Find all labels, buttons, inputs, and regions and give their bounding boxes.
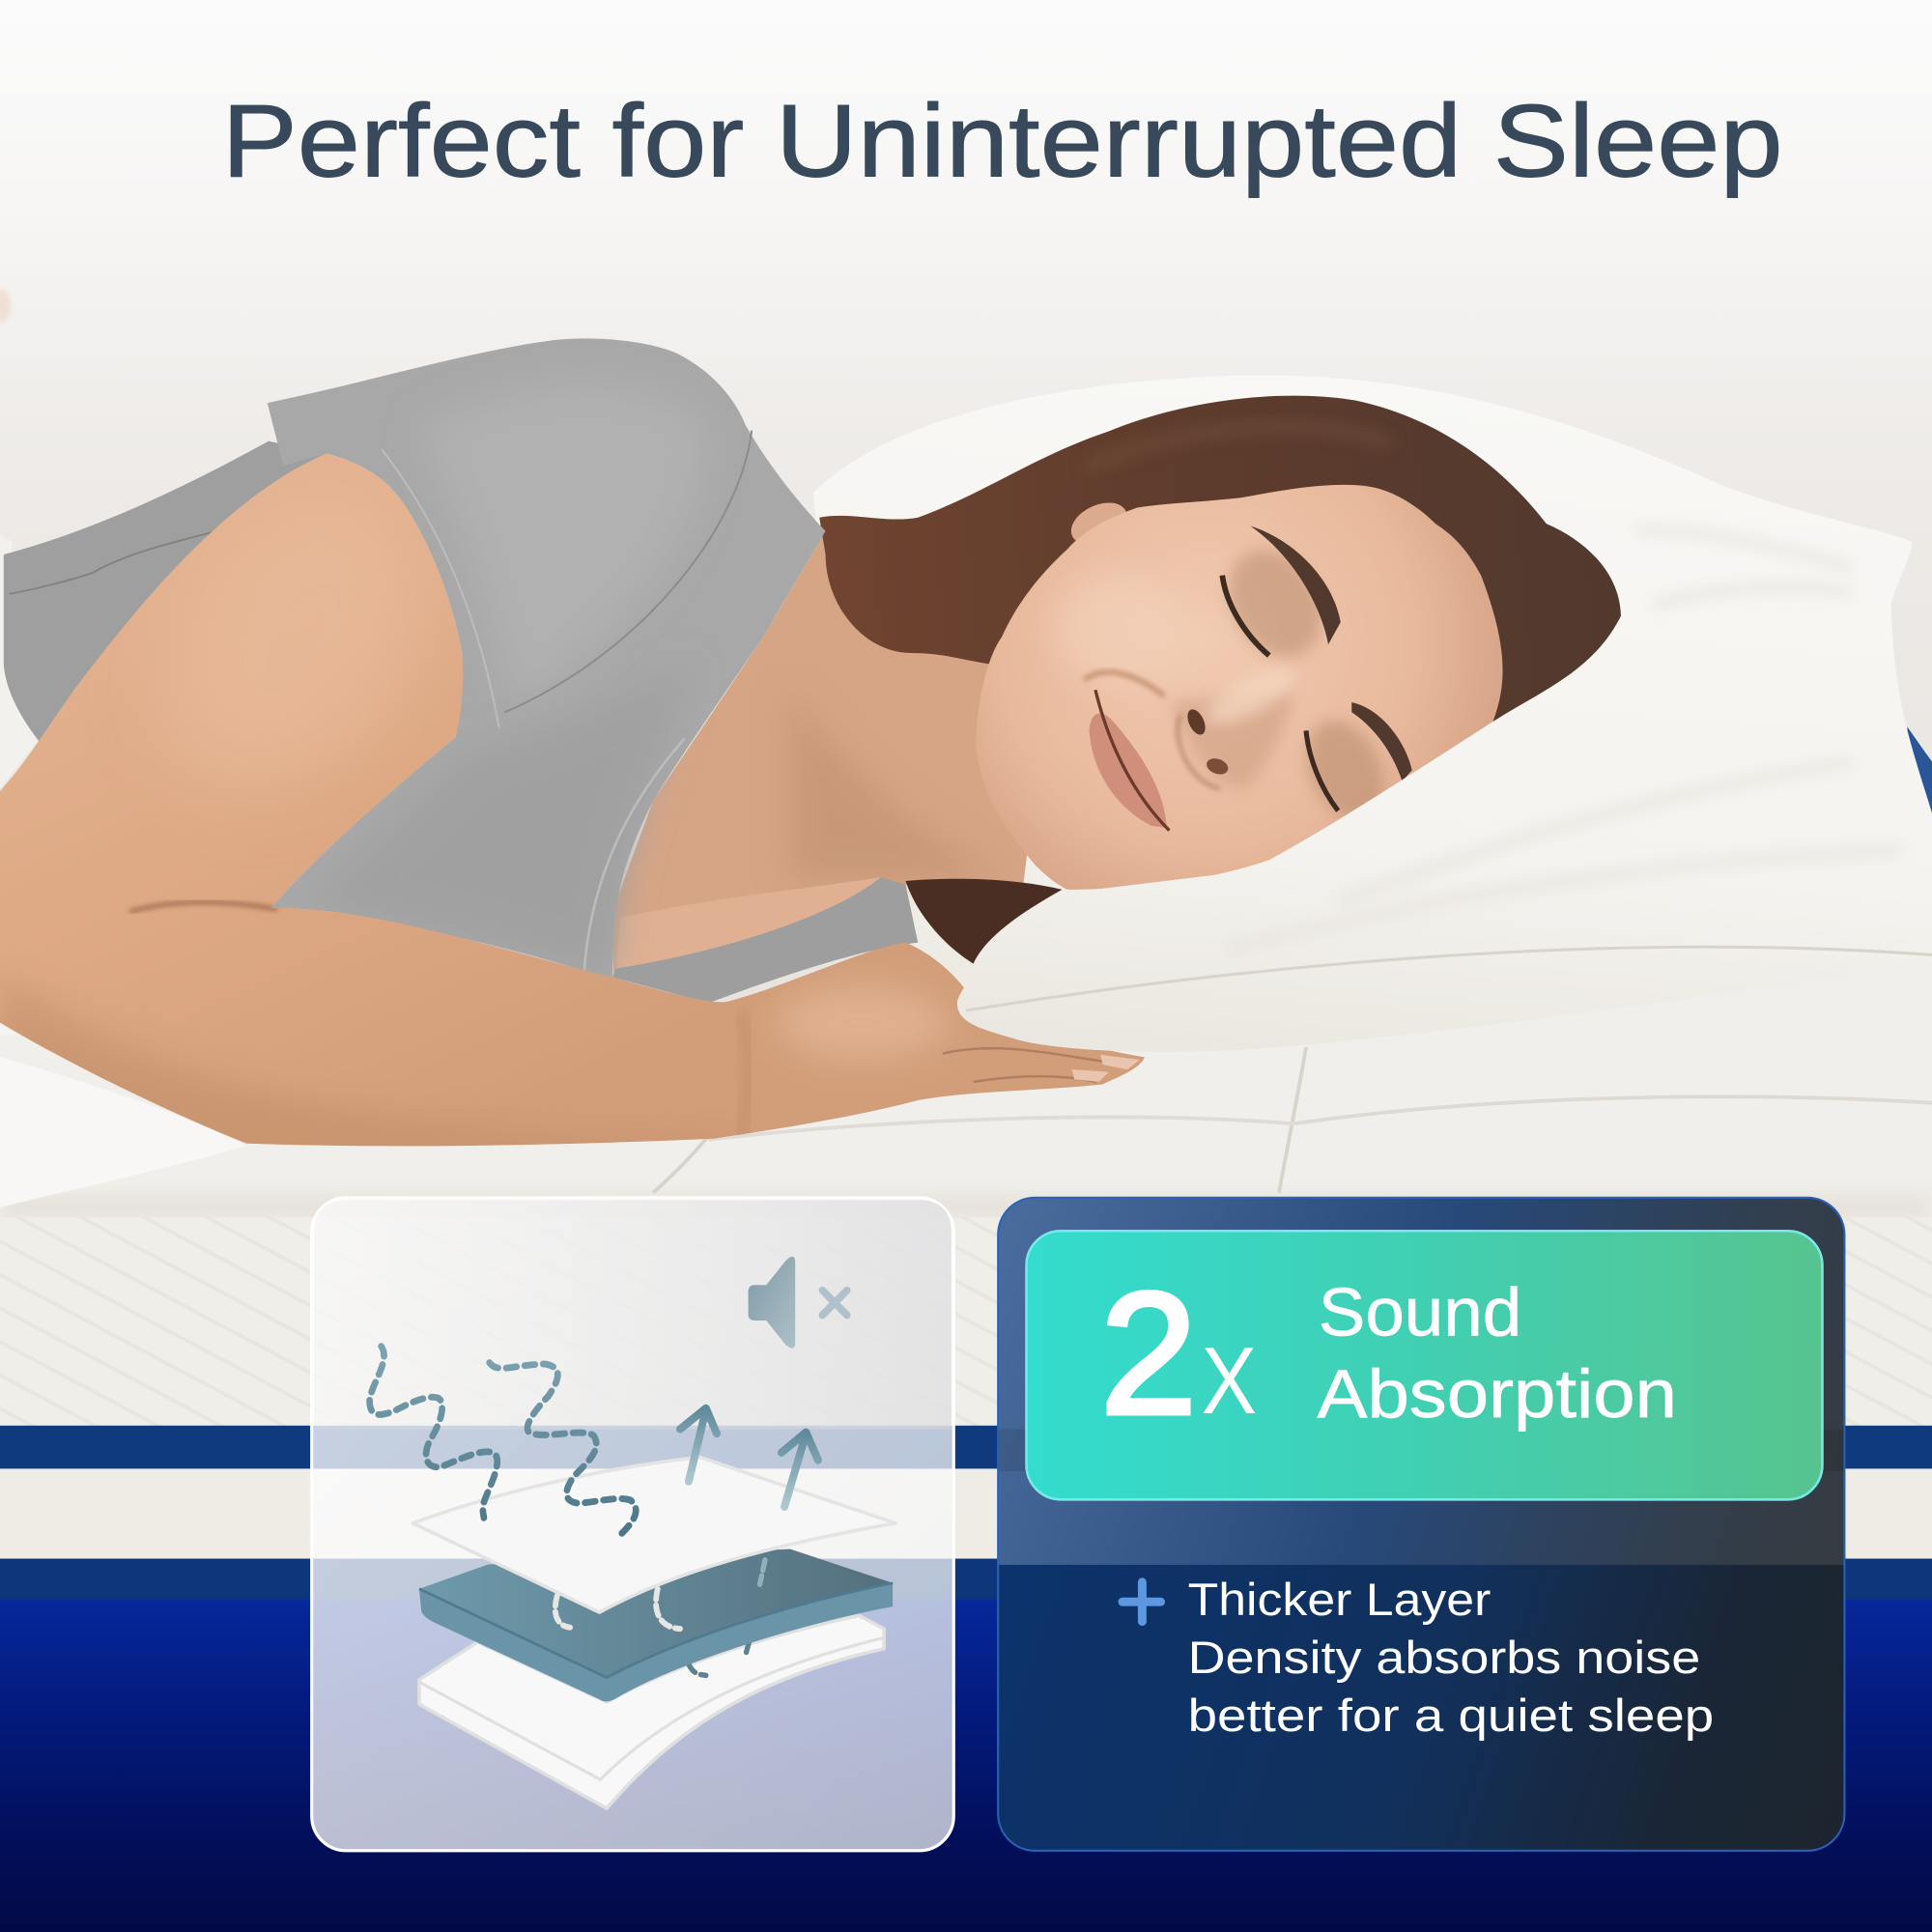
nose form — [1178, 715, 1220, 788]
upper eyelid shadow — [1225, 546, 1324, 662]
description text — [1188, 1575, 1714, 1742]
foam top — [419, 1548, 893, 1678]
photo: chest — [616, 877, 881, 971]
photo: shirt seams — [10, 431, 752, 974]
illustration — [370, 1257, 895, 1808]
upper eyelashes — [1222, 576, 1269, 656]
blue sliver behind pillow — [1907, 727, 1932, 813]
photo: lower hair — [906, 879, 1062, 963]
hem fold — [10, 529, 222, 594]
panel: layered foam illustration card — [312, 1198, 953, 1851]
card outline — [998, 1198, 1844, 1851]
glass card — [312, 1198, 953, 1851]
photo: sheet behind shoulder — [0, 535, 37, 788]
teal foam layer — [419, 1548, 893, 1701]
nostril upper — [1184, 706, 1208, 737]
line two: Density absorbs noise — [1188, 1633, 1700, 1684]
photo: front of pillow — [957, 487, 1932, 1052]
photo: face — [976, 485, 1503, 890]
stat number: 2 — [1100, 1257, 1197, 1451]
bottom layer edge line — [419, 1637, 884, 1779]
photo: neck and chest — [612, 529, 1060, 980]
forearm lower shade — [0, 993, 701, 1146]
photo: shirt main — [268, 338, 826, 980]
speaker body — [749, 1257, 795, 1349]
stat label — [1318, 1274, 1677, 1432]
photo background: wall — [0, 0, 1932, 1010]
lower glass — [998, 1565, 1844, 1851]
mute cross — [822, 1291, 847, 1315]
upper eyebrow — [1251, 526, 1341, 644]
pillow soft ribs — [1233, 529, 1897, 949]
sound dashes on foam — [555, 1589, 680, 1629]
photo: ear — [1065, 495, 1134, 553]
photo: shirt light area — [419, 384, 706, 702]
mouth line — [1095, 690, 1169, 831]
stat multiplier: X — [1202, 1327, 1257, 1434]
photo: shirt v-neck piece — [612, 877, 918, 1003]
stat panel — [1026, 1231, 1822, 1499]
fingernails — [1072, 1055, 1140, 1082]
lower eyebrow — [1351, 702, 1412, 781]
photo: arm and hand — [0, 453, 1145, 1146]
panel: sound absorption card — [998, 1198, 1844, 1851]
photo: back of pillow — [813, 375, 1932, 1052]
photo: mattress — [0, 727, 1932, 1932]
bottom foam layer — [419, 1615, 884, 1808]
wrist shade — [742, 1134, 746, 1135]
mattress top surface — [0, 949, 1932, 1233]
photo: pillow ribs and piping — [967, 529, 1932, 1010]
photo: main hair — [819, 396, 1621, 764]
photo: arm shading — [0, 446, 1140, 1164]
mattress side panel — [0, 1217, 1932, 1430]
arrow up left — [680, 1408, 717, 1482]
label line one: Sound — [1319, 1274, 1521, 1350]
arm crease — [129, 902, 277, 912]
upper glass — [998, 1198, 1844, 1567]
sound wave one — [370, 1347, 497, 1518]
sleeve seam — [505, 431, 752, 712]
seam: front — [708, 1117, 1293, 1140]
lips — [1090, 713, 1167, 828]
title: Perfect for Uninterrupted Sleep — [222, 82, 1783, 198]
band tint — [998, 1430, 1844, 1471]
foam side — [419, 1583, 893, 1701]
white middle band — [0, 1468, 1932, 1560]
photo: shirt back — [4, 441, 327, 742]
dark blue base gradient — [0, 1600, 1932, 1932]
nose shadow — [1171, 690, 1293, 788]
seam: middle — [653, 1136, 708, 1193]
photo: faint pink at left edge — [0, 288, 11, 323]
upper arm highlight — [190, 538, 402, 773]
seam: right horizontal — [1293, 1096, 1932, 1123]
finger lines — [943, 1048, 1109, 1082]
lower blue piping — [0, 1559, 1932, 1603]
arrow up right — [781, 1433, 818, 1507]
face base — [976, 485, 1503, 890]
dark glass card — [998, 1198, 1844, 1851]
faint dash on foam — [760, 1560, 765, 1584]
photo: hair highlight — [1084, 426, 1392, 469]
icon: muted speaker — [749, 1257, 847, 1349]
nostril lower — [1205, 755, 1231, 777]
sound wave two — [490, 1363, 636, 1536]
label line two: Absorption — [1318, 1355, 1677, 1432]
cheek highlight — [1061, 581, 1165, 670]
line three: better for a quiet sleep — [1188, 1690, 1714, 1742]
lower eyelashes — [1306, 730, 1338, 810]
hand highlight — [777, 985, 949, 1060]
sound dash below foam — [689, 1642, 749, 1675]
lower eyelid shadow — [1302, 717, 1387, 818]
seam: right vertical — [1279, 1047, 1306, 1193]
photo: shirt lower shade — [308, 666, 690, 974]
neckline stitching — [584, 739, 684, 974]
mattress top shade — [0, 1193, 1932, 1222]
upper blue piping — [0, 1426, 1932, 1470]
pillow piping — [967, 947, 1932, 1010]
nose highlight — [1204, 668, 1293, 728]
glass upper tint — [314, 1200, 952, 1430]
line one: Thicker Layer — [1188, 1575, 1491, 1626]
top white sheet — [412, 1457, 895, 1612]
foam edge line — [419, 1583, 893, 1678]
photo: neck shading — [788, 690, 1023, 881]
sleeve cuff stitching — [382, 450, 499, 727]
photo: white bedding at left — [0, 1057, 246, 1208]
icon: plus — [1122, 1582, 1161, 1622]
smile fold — [1084, 672, 1164, 696]
